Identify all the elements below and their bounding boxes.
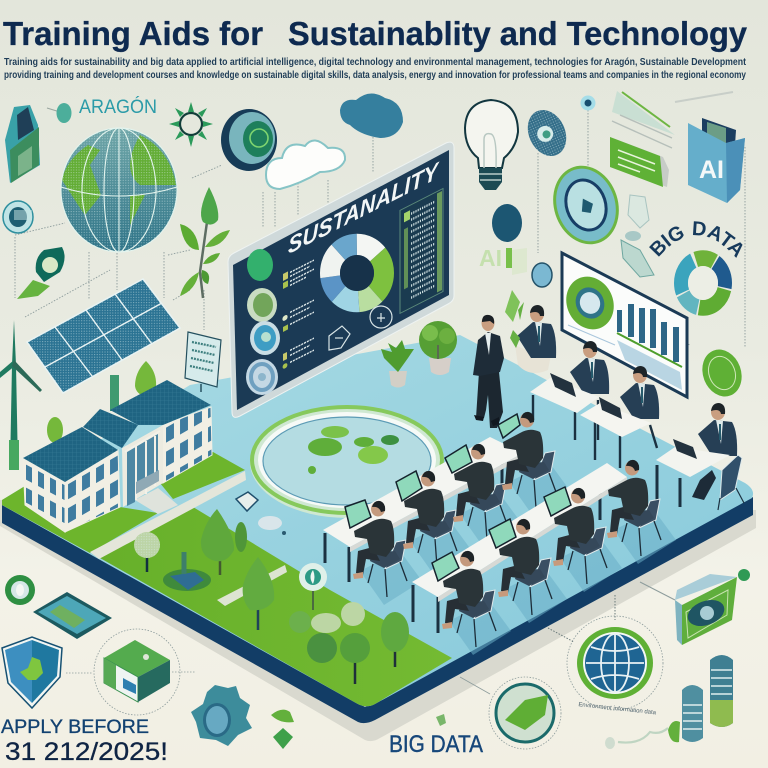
laptops row two — [432, 487, 571, 581]
green button — [247, 249, 273, 281]
lawn: garden — [100, 507, 452, 706]
screen title: SUSTANALITY — [288, 157, 440, 260]
table row two — [412, 463, 627, 633]
data cylinders — [605, 655, 733, 749]
students row two — [442, 551, 511, 655]
display donut — [558, 269, 622, 337]
tree with dark trunk — [243, 557, 274, 630]
wall display — [558, 253, 687, 397]
icon: small round — [492, 204, 522, 242]
dotted connector lines — [15, 110, 745, 347]
small green leaves — [271, 710, 446, 749]
central pond — [250, 406, 444, 518]
AI label: AI — [699, 156, 724, 184]
right roof — [110, 380, 211, 425]
table row one — [323, 437, 523, 582]
icon: tag — [47, 103, 72, 123]
garden tree mid — [340, 633, 370, 684]
icon: pin — [580, 96, 596, 110]
icon: white cloud — [266, 140, 345, 189]
white bushes — [289, 602, 365, 663]
icon: sun gear — [169, 102, 213, 147]
globe badge — [548, 595, 663, 716]
middle roof — [83, 409, 138, 448]
intro text — [4, 56, 746, 81]
lawn: right of building — [160, 452, 245, 499]
left wing side — [23, 460, 65, 532]
pale AI mark: AI — [479, 245, 502, 271]
globe grid — [61, 128, 177, 252]
classroom row one — [323, 412, 571, 605]
tall tree — [201, 509, 234, 575]
wind turbine — [0, 320, 42, 470]
platform edge — [2, 497, 753, 723]
icon: blue cloud — [340, 93, 403, 138]
small trees behind building — [47, 361, 156, 443]
icon: light bulb — [465, 100, 518, 190]
icon: AI box — [688, 118, 745, 203]
data table — [400, 188, 443, 313]
image circle three — [246, 359, 278, 395]
small glass icons — [621, 195, 654, 277]
leaf lens icon — [460, 677, 561, 749]
globe — [61, 128, 177, 252]
icon: plant sprig — [180, 187, 230, 298]
big data arc title: BIG DATA — [649, 221, 742, 258]
continents — [62, 135, 176, 225]
title: Training Aids for — [3, 15, 263, 52]
lawn: front left — [2, 486, 158, 553]
flowering tree — [134, 532, 160, 572]
image circle two — [250, 321, 280, 355]
donut chart — [330, 244, 384, 302]
classroom row two — [412, 460, 676, 655]
students row one — [353, 501, 422, 605]
icon: lens — [221, 109, 277, 171]
icon: leaf badge — [17, 247, 65, 299]
platform shadow — [0, 500, 756, 741]
icon: folder — [5, 105, 40, 183]
outline icons — [329, 306, 392, 350]
round floor badge — [299, 563, 327, 610]
teacher — [473, 315, 504, 428]
title — [3, 15, 748, 52]
panel body — [27, 279, 180, 393]
display bars — [617, 304, 679, 362]
solar panel — [27, 279, 180, 411]
seated person with plant — [510, 302, 556, 373]
small tree — [235, 522, 247, 552]
big data donut — [681, 258, 725, 308]
apply before text: 31 212/2025! — [5, 738, 168, 766]
bottom gear icon — [5, 575, 35, 605]
garden trees — [134, 509, 409, 684]
eye card icon — [640, 569, 750, 645]
right wing — [163, 407, 212, 483]
desk A — [530, 341, 609, 440]
apply before text — [1, 717, 168, 766]
garden tree right — [381, 612, 409, 667]
floor markers — [236, 492, 286, 535]
icon: green card — [610, 137, 669, 187]
icon: big dial — [543, 157, 629, 253]
globe badge: Environment information data — [578, 702, 657, 716]
left roof — [23, 427, 118, 482]
shield icon — [2, 637, 62, 708]
list items — [282, 258, 314, 370]
image circle one — [247, 288, 277, 322]
screen face — [233, 150, 449, 410]
bottom tablet icon — [33, 592, 112, 639]
pond islands — [308, 426, 399, 474]
pond feature — [163, 552, 211, 591]
panel pole — [110, 375, 119, 411]
green box icon — [66, 629, 195, 715]
screen frame — [228, 142, 454, 417]
signboard — [185, 332, 221, 392]
title: Sustainablity and Technology — [288, 15, 748, 52]
entrance path — [135, 488, 178, 514]
apply before text: APPLY BEFORE — [1, 717, 149, 738]
desk B — [580, 366, 659, 468]
icon: top charts card — [612, 91, 733, 148]
building — [23, 380, 212, 532]
platform floor — [2, 335, 753, 706]
left wing front — [65, 450, 120, 532]
centre portico — [122, 425, 163, 507]
green badge — [696, 344, 748, 402]
side plant on stand — [505, 290, 520, 322]
icon: textured lens — [521, 104, 573, 162]
icon: circle badge — [3, 201, 33, 233]
plant right — [419, 321, 457, 375]
large gear icon — [191, 685, 252, 746]
back desks and staff — [473, 302, 744, 510]
desk C — [656, 403, 744, 510]
plant left — [381, 340, 414, 388]
pale AI mark — [479, 245, 552, 287]
garden path — [90, 471, 246, 559]
laptops row one — [345, 414, 520, 528]
path near trees — [217, 565, 287, 606]
main sustainability screen — [228, 142, 454, 417]
aragon label: ARAGÓN — [79, 96, 157, 118]
big data label: BIG DATA — [389, 731, 483, 758]
display frame — [562, 253, 687, 397]
